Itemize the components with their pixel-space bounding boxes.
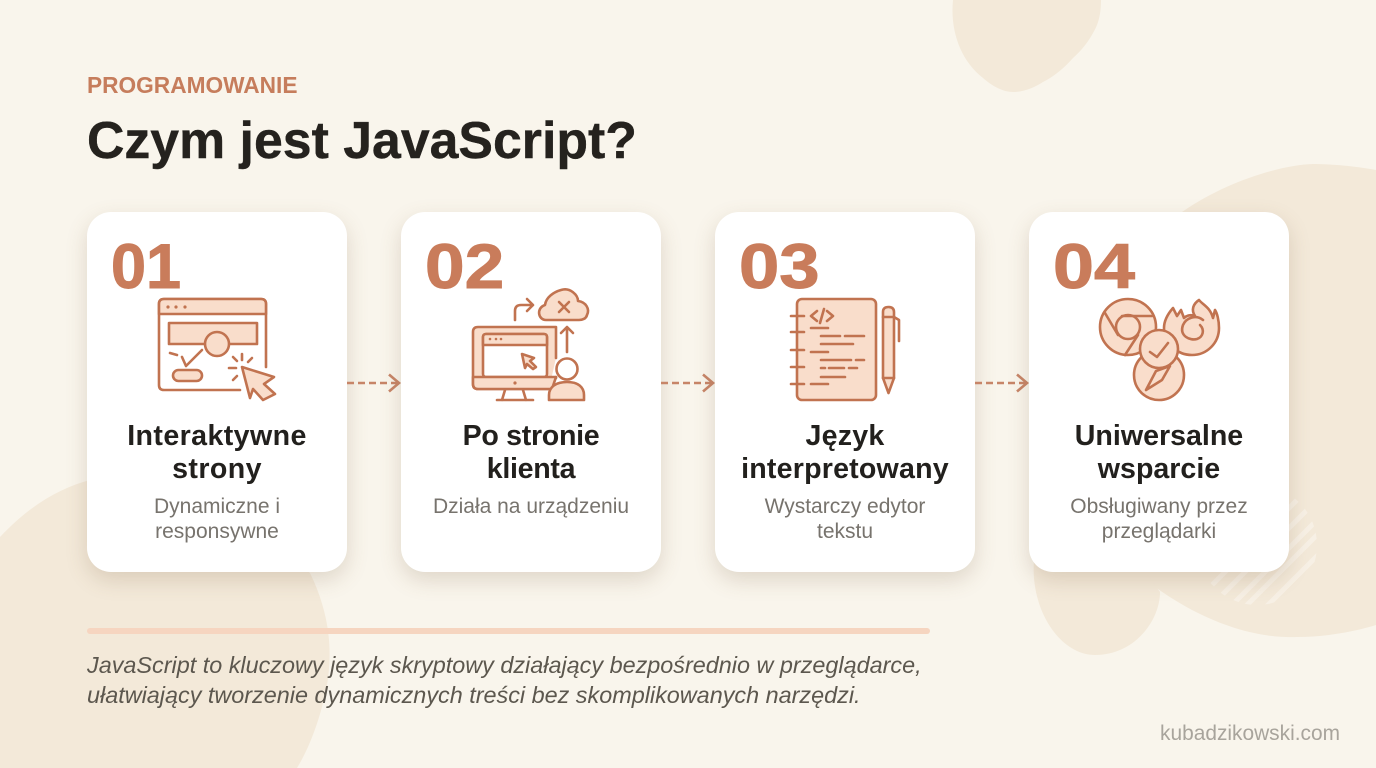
eyebrow label: PROGRAMOWANIE [87,72,298,98]
description: Dynamiczne i [154,495,280,518]
summary text: ułatwiający tworzenie dynamicznych treści bez skomplikowanych narzędzi. [87,682,861,708]
divider bar [87,628,930,634]
description: przeglądarki [1102,520,1216,543]
icon: browser logos with check [1098,298,1220,402]
description [1070,495,1248,543]
heading [1075,420,1243,485]
website credit: kubadzikowski.com [1160,722,1340,745]
arrow 1 to 2 [347,374,401,392]
arrow 3 to 4 [975,374,1029,392]
heading [127,420,307,485]
heading: klienta [487,453,575,485]
panel: card 03 [715,212,975,572]
panel: card 02 [401,212,661,572]
heading [741,420,949,485]
summary text [87,652,922,708]
description: tekstu [817,520,873,543]
heading: Po stronie [463,420,599,452]
heading [463,420,599,485]
icon: notebook with code and pen [790,298,900,402]
step number 01: 01 [111,232,181,302]
heading: wsparcie [1098,453,1220,485]
heading: Interaktywne [127,420,307,452]
icon: computer, cloud and user [472,288,590,402]
title: Czym jest JavaScript? [87,111,637,169]
description [764,495,925,543]
panel: card 01 [87,212,347,572]
description: Działa na urządzeniu [433,495,629,518]
panel: card 04 [1029,212,1289,572]
step number 02: 02 [425,232,504,302]
description: responsywne [155,520,279,543]
description: Wystarczy edytor [765,495,925,518]
step number 04: 04 [1053,232,1135,302]
step number 03: 03 [739,232,820,302]
arrow 2 to 3 [661,374,715,392]
heading: strony [172,453,262,485]
heading: Uniwersalne [1075,420,1243,452]
icon: interactive browser window [158,298,276,402]
description [154,495,280,543]
description: Obsługiwany przez [1070,495,1248,518]
heading: Język [806,420,884,452]
summary text: JavaScript to kluczowy język skryptowy działający bezpośrednio w przeglądarce, [87,652,922,678]
heading: interpretowany [741,453,949,485]
